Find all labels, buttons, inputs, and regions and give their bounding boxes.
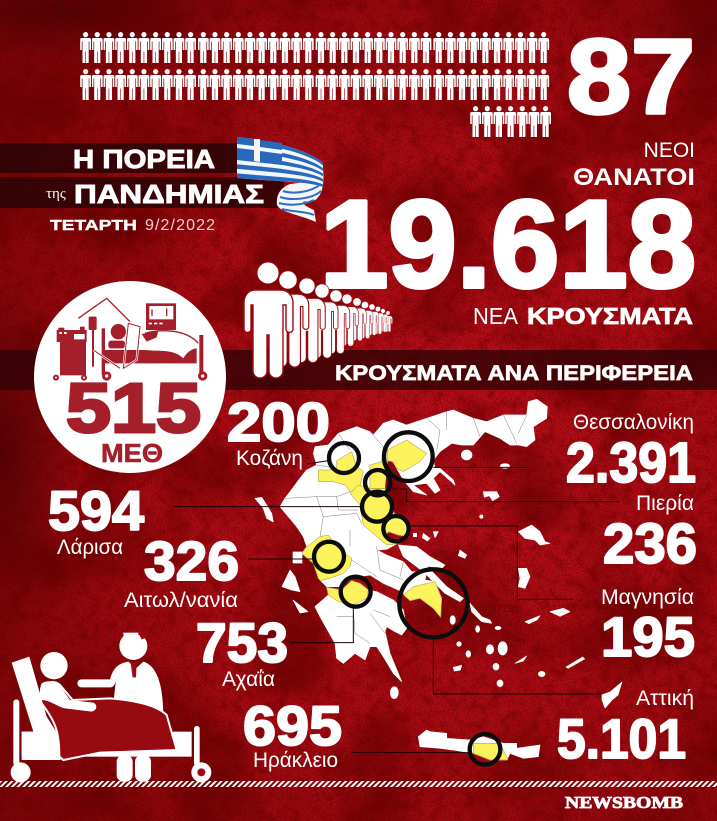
- icon: greek flag ribbon: [237, 137, 323, 222]
- data: Thessaloniki: 2.391: [566, 431, 696, 495]
- data: Pieria: 236: [603, 512, 697, 576]
- map: land: [255, 399, 622, 760]
- map: internal borders: [285, 412, 527, 643]
- data: Thessaloniki: Θεσσαλονίκη: [573, 411, 694, 434]
- map: highlighted regions: [302, 440, 508, 760]
- icon: doctor and patient in bed: [11, 631, 211, 782]
- data: Achaia: 753: [196, 611, 288, 674]
- number: 515 ICU: 515: [66, 369, 201, 447]
- map: region circles: [314, 432, 500, 765]
- title banner: Η ΠΟΡΕΙΑ: [73, 144, 215, 174]
- data: Aitoloakarnania: 326: [144, 530, 239, 592]
- date: [50, 217, 215, 234]
- faint stray map number: 6778: [491, 604, 514, 615]
- title banner: της: [46, 186, 66, 202]
- icon: ICU bed: [53, 298, 207, 381]
- label: ICU: ΜΕΘ: [101, 438, 163, 468]
- data: Attica: 5.101: [557, 707, 686, 770]
- icon row: 87 people deaths: [80, 32, 551, 137]
- data: Larisa: 594: [48, 479, 144, 542]
- title banner: ΠΑΝΔΗΜΙΑΣ: [74, 179, 264, 209]
- data: Achaia: Αχαΐα: [222, 668, 275, 691]
- map of Greece: [173, 399, 622, 765]
- data: Attica: Αττική: [636, 687, 694, 710]
- data: Magnesia: Μαγνησία: [601, 586, 694, 609]
- data: Heraklion: 695: [243, 694, 342, 757]
- data: Pieria: Πιερία: [636, 492, 694, 515]
- data: Kozani: Κοζάνη: [236, 447, 303, 470]
- label: new cases: [473, 303, 693, 329]
- label: new deaths: ΝΕΟΙ: [644, 139, 695, 162]
- number: 87 new deaths: 87: [567, 18, 695, 136]
- map: leader lines: [173, 461, 620, 753]
- data: Kozani: [227, 391, 330, 470]
- number: 19.618 new cases: 19.618: [320, 176, 696, 314]
- data: Aitoloakarnania: Αιτωλ/νανία: [124, 589, 238, 612]
- hatched footer strip: [0, 781, 717, 787]
- logo: Newsbomb: NEWSBOMB: [565, 793, 683, 812]
- label: new cases: ΚΡΟΥΣΜΑΤΑ: [527, 303, 693, 329]
- band: cases per region: [0, 350, 717, 390]
- label: new deaths: [573, 139, 695, 191]
- panel: ICU patients badge: [34, 281, 226, 473]
- data: Larisa: Λάρισα: [57, 536, 123, 559]
- data: Magnesia: 195: [601, 605, 695, 668]
- data: Aitoloakarnania: [124, 530, 239, 612]
- heading: cases by region: ΚΡΟΥΣΜΑΤΑ ΑΝΑ ΠΕΡΙΦΕΡΕΙΑ: [335, 362, 693, 385]
- date: 9/2/2022: [145, 217, 215, 234]
- label: new deaths: ΘΑΝΑΤΟΙ: [573, 164, 695, 191]
- title banner: [0, 143, 284, 209]
- icon: queue of people: [244, 262, 392, 378]
- label: new cases: ΝΕΑ: [473, 303, 519, 329]
- data: Heraklion: Ηράκλειο: [253, 749, 338, 772]
- date: ΤΕΤΑΡΤΗ: [50, 217, 137, 234]
- data: Kozani: 200: [227, 391, 330, 453]
